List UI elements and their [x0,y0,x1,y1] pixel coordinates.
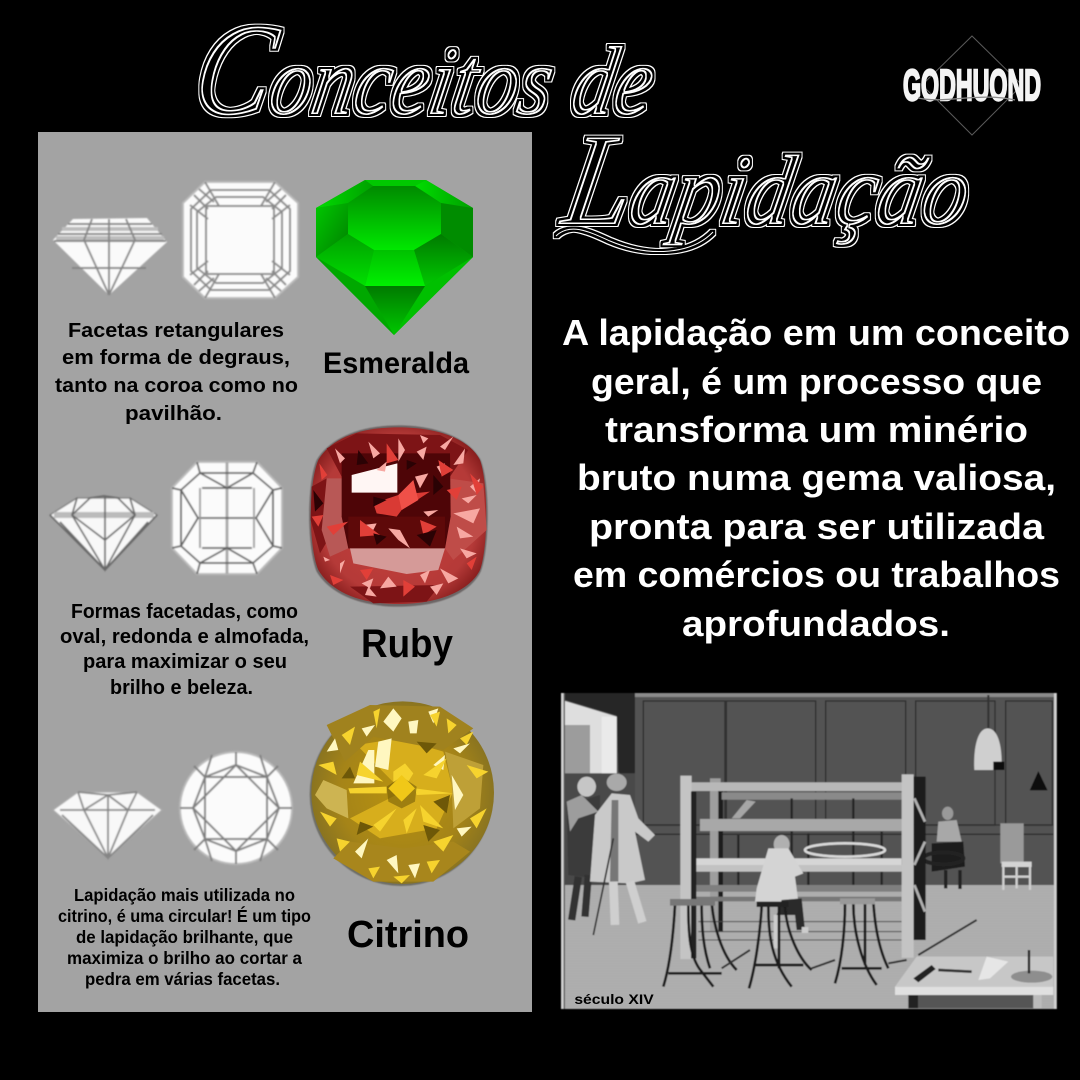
label: Ruby: Ruby [361,622,454,666]
text: ruby description: para maximizar o seu [83,650,287,673]
label: Esmeralda: Esmeralda [323,347,469,380]
text: intro paragraph [562,312,1070,644]
text: emerald description: tanto na coroa como no [55,374,298,397]
text: citrine description: de lapidação brilhante, que [76,927,293,947]
image: gem-cutting workshop engraving [561,693,1057,1009]
text: citrine description: pedra em várias facetas. [85,969,280,989]
text: ruby description [60,600,309,699]
logo: GODHUOND [903,36,1041,135]
title: Conceitos de [185,0,669,143]
text: ruby description: brilho e beleza. [110,676,253,699]
text: intro paragraph: transforma um minério [605,409,1028,450]
text: emerald description: em forma de degraus, [62,346,290,369]
text: citrine description: Lapidação mais utilizada no [74,885,295,905]
panel: gem cuts [38,132,532,1012]
title [185,0,984,253]
text: citrine description: maximiza o brilho ao cortar a [67,948,302,968]
text: emerald description [55,319,298,425]
text: citrine description: citrino, é uma circular! É um tipo [58,905,311,926]
text: intro paragraph: bruto numa gema valiosa, [577,457,1056,498]
text: intro paragraph: em comércios ou trabalhos [573,554,1060,595]
icon: citrine cut side view [53,792,162,858]
label: Citrino: Citrino [347,914,469,956]
text: intro paragraph: geral, é um processo que [591,361,1042,402]
text: intro paragraph: A lapidação em um conceito [562,312,1070,353]
caption: século XIV [574,991,654,1007]
text: ruby description: oval, redonda e almofada, [60,625,309,648]
icon: emerald gem [316,180,473,335]
text: emerald description: Facetas retangulares [68,319,284,342]
title: Lapidação [553,106,984,253]
icon: emerald cut top view [183,182,298,298]
icon: citrine cut top view [180,752,292,864]
icon: emerald cut side view [53,218,167,295]
text: emerald description: pavilhão. [125,402,222,425]
icon: ruby cut side view [50,496,157,570]
icon: citrine gem [310,701,494,886]
text: ruby description: Formas facetadas, como [71,600,298,623]
icon: ruby cut top view [172,462,282,574]
text: citrine description [58,885,311,989]
icon: ruby gem [309,425,488,607]
text: intro paragraph: aprofundados. [682,603,950,644]
text: intro paragraph: pronta para ser utilizada [589,506,1045,547]
